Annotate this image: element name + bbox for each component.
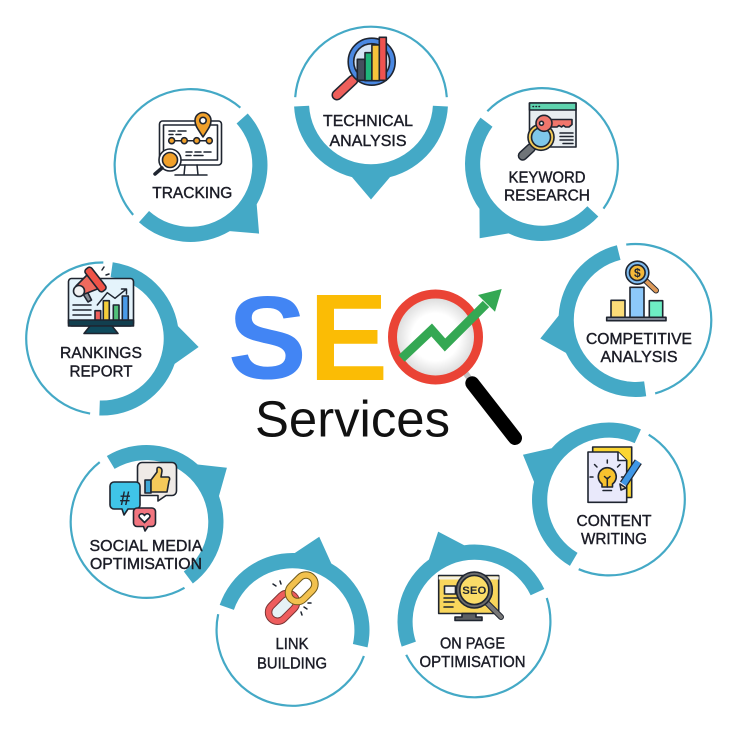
label: social media optimisation: OPTIMISATION xyxy=(90,556,202,573)
icon: document with light bulb and pencil xyxy=(588,447,638,502)
title: SEO Services xyxy=(228,270,515,448)
badge ring: content writing xyxy=(487,386,712,603)
badge ring: link building xyxy=(198,516,393,724)
label: rankings report: RANKINGS xyxy=(60,345,142,362)
label: keyword research xyxy=(504,170,590,205)
label: link building xyxy=(257,636,327,673)
label: content writing xyxy=(576,513,652,548)
panel: on page optimisation xyxy=(367,503,574,721)
label: technical analysis: TECHNICAL xyxy=(323,113,413,130)
label: on page optimisation: ON PAGE xyxy=(440,636,505,653)
title word: Services: Services xyxy=(255,390,450,448)
title letter: E: E xyxy=(309,270,388,407)
icon: social chat bubbles xyxy=(110,462,176,531)
badge ring: tracking xyxy=(83,57,313,288)
badge ring: technical analysis xyxy=(294,27,448,199)
panel: tracking xyxy=(83,57,313,288)
label: link building: BUILDING xyxy=(257,656,327,673)
icon: monitor with SEO magnifier: SEO xyxy=(462,585,487,597)
panel: link building xyxy=(198,516,393,724)
label: keyword research: RESEARCH xyxy=(504,188,590,205)
label: keyword research: KEYWORD xyxy=(508,170,586,187)
badge ring: rankings report xyxy=(20,255,205,424)
icon: monitor with SEO magnifier xyxy=(439,572,501,620)
label: technical analysis: ANALYSIS xyxy=(330,133,406,150)
panel: rankings report xyxy=(20,255,205,424)
icon: browser window with key and magnifier xyxy=(523,103,576,156)
badge ring: social media optimisation xyxy=(41,404,270,628)
label: on page optimisation: OPTIMISATION xyxy=(420,654,526,671)
label: competitive analysis xyxy=(586,331,692,366)
badge ring: competitive analysis xyxy=(526,230,725,414)
label: rankings report: REPORT xyxy=(70,364,133,381)
label: social media optimisation xyxy=(90,538,203,573)
magnifying glass O with growth arrow xyxy=(392,289,515,438)
icon: chain link xyxy=(265,571,319,625)
label: content writing: CONTENT xyxy=(576,513,652,530)
panel: competitive analysis xyxy=(526,230,725,414)
icon: monitor with megaphone and chart xyxy=(68,266,134,334)
label: social media optimisation: SOCIAL MEDIA xyxy=(90,538,203,555)
badge ring: keyword research xyxy=(421,57,650,288)
label: content writing: WRITING xyxy=(581,531,647,548)
label: tracking: TRACKING xyxy=(152,185,232,202)
icon: magnifier over bar chart xyxy=(337,37,395,95)
label: competitive analysis: COMPETITIVE xyxy=(586,331,692,348)
icon: bars with dollar magnifier: $ xyxy=(634,266,641,280)
panel: technical analysis xyxy=(294,27,448,199)
badge ring: on page optimisation xyxy=(367,503,574,721)
label: on page optimisation xyxy=(420,636,526,671)
icon: social chat bubbles: # xyxy=(120,489,131,510)
label: rankings report xyxy=(60,345,142,381)
label: competitive analysis: ANALYSIS xyxy=(600,349,678,366)
icon: bars with dollar magnifier xyxy=(607,261,666,321)
panel: social media optimisation xyxy=(41,404,270,628)
label: link building: LINK xyxy=(276,636,309,653)
title letter: S: S xyxy=(228,272,307,404)
panel: keyword research xyxy=(421,57,650,288)
panel: content writing xyxy=(487,386,712,603)
icon: monitor with location pin and magnifier xyxy=(155,112,222,175)
label: technical analysis xyxy=(323,113,413,150)
